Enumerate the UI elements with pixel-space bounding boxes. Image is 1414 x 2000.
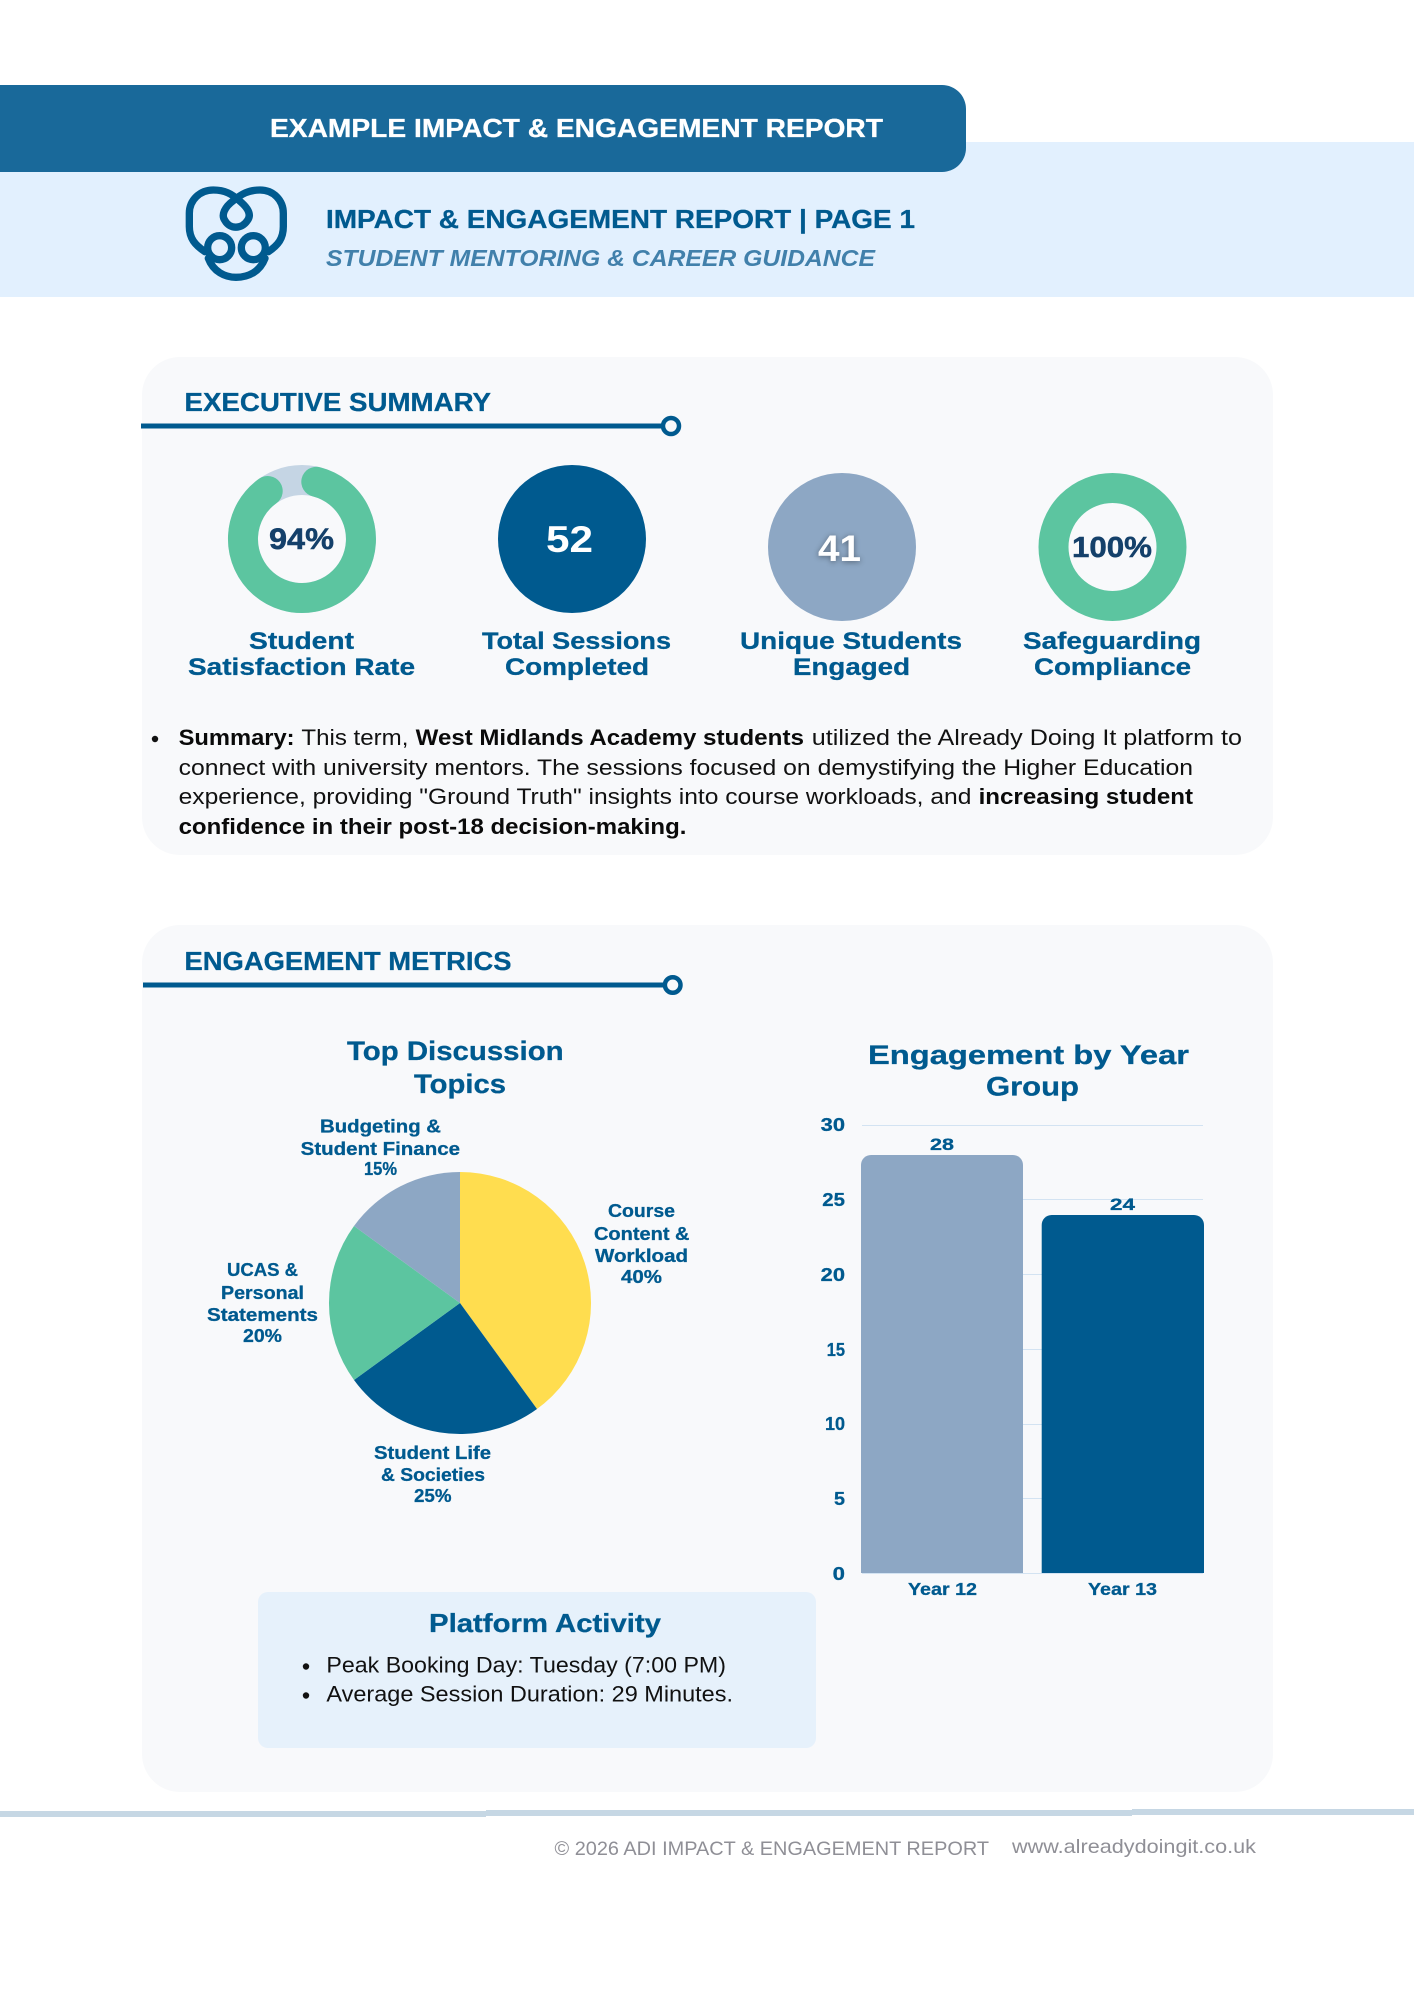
bar chart bbox=[821, 1115, 1204, 1599]
pie label: student life: Student Life bbox=[374, 1442, 491, 1463]
label: sessions bbox=[482, 628, 671, 681]
bar chart title: Engagement by Year bbox=[868, 1040, 1190, 1070]
header bar bbox=[0, 85, 966, 172]
kpi: unique students bbox=[768, 473, 916, 621]
bar value: 24: 24 bbox=[1110, 1195, 1136, 1214]
y axis labels: 30 bbox=[821, 1115, 845, 1135]
summary text: experience, providing "Ground Truth" insights into course workloads, and bbox=[179, 784, 971, 809]
x label: year 13: Year 13 bbox=[1088, 1579, 1157, 1599]
bar: year 13 bbox=[1042, 1215, 1204, 1573]
pie label: ucas: 20% bbox=[243, 1325, 282, 1346]
summary text: connect with university mentors. The sessions focused on demystifying the Higher Education bbox=[179, 755, 1193, 780]
pie chart title bbox=[347, 1036, 564, 1099]
callout heading: Platform Activity bbox=[429, 1608, 662, 1638]
summary text: West Midlands Academy bbox=[416, 725, 697, 750]
summary text: students bbox=[703, 725, 804, 750]
pie label: budgeting: Student Finance bbox=[301, 1138, 460, 1159]
kpi: safeguarding donut bbox=[1054, 488, 1172, 606]
report title: IMPACT & ENGAGEMENT REPORT | PAGE 1 bbox=[326, 204, 915, 234]
summary text: confidence in their post-18 decision-making. bbox=[179, 814, 686, 839]
kpi: satisfaction donut bbox=[243, 480, 361, 598]
summary text: This term, bbox=[301, 725, 408, 750]
pie label: course content: Content & bbox=[594, 1223, 690, 1244]
y axis labels: 0 bbox=[833, 1564, 845, 1584]
pie label: student life: 25% bbox=[414, 1485, 452, 1506]
label: students: Engaged bbox=[793, 654, 910, 681]
bar chart title: Group bbox=[986, 1072, 1079, 1102]
pie label: student life: & Societies bbox=[381, 1464, 485, 1485]
kpi value: 41 bbox=[818, 528, 861, 569]
kpi value: 100% bbox=[1072, 532, 1152, 564]
kpi: total sessions bbox=[498, 465, 646, 613]
pie chart title: Top Discussion bbox=[347, 1036, 564, 1066]
y axis labels: 10 bbox=[825, 1414, 845, 1434]
panel: engagement metrics bbox=[142, 925, 1273, 1792]
header bar title: EXAMPLE IMPACT & ENGAGEMENT REPORT bbox=[270, 113, 883, 143]
pie label: course content: 40% bbox=[621, 1266, 662, 1287]
label: sessions: Total Sessions bbox=[482, 628, 671, 655]
summary text: Summary: bbox=[179, 725, 295, 750]
x label: year 12: Year 12 bbox=[908, 1579, 977, 1599]
callout list: Average Session Duration: 29 Minutes. bbox=[326, 1682, 733, 1707]
label: satisfaction bbox=[188, 628, 415, 681]
heading: executive summary: EXECUTIVE SUMMARY bbox=[184, 387, 491, 417]
pie label: student life bbox=[374, 1442, 491, 1506]
heading rule bbox=[143, 977, 680, 993]
bar chart title bbox=[868, 1040, 1190, 1102]
pie label: budgeting: Budgeting & bbox=[320, 1116, 441, 1136]
y axis labels: 20 bbox=[821, 1265, 845, 1285]
icon: logo bbox=[189, 190, 283, 277]
label: students: Unique Students bbox=[740, 628, 962, 655]
summary text: utilized the Already Doing It platform to bbox=[812, 725, 1242, 750]
pie label: ucas: Statements bbox=[207, 1304, 318, 1325]
heading rule bbox=[141, 418, 679, 434]
kpi value: 94% bbox=[269, 523, 334, 556]
pie label: course content bbox=[594, 1200, 690, 1287]
pie label: ucas: Personal bbox=[221, 1282, 304, 1303]
footer rule bbox=[0, 1809, 1414, 1817]
pie label: course content: Workload bbox=[595, 1245, 688, 1266]
callout list: Peak Booking Day: Tuesday (7:00 PM) bbox=[326, 1653, 726, 1678]
label: safeguarding: Compliance bbox=[1034, 654, 1191, 681]
y axis labels: 15 bbox=[827, 1340, 845, 1360]
panel: executive summary bbox=[141, 357, 1273, 855]
label: satisfaction: Satisfaction Rate bbox=[188, 654, 415, 681]
pie chart bbox=[329, 1172, 591, 1434]
footer copyright: © 2026 ADI IMPACT & ENGAGEMENT REPORT bbox=[554, 1838, 989, 1860]
pie label: budgeting bbox=[301, 1116, 460, 1179]
y axis labels: 25 bbox=[822, 1190, 845, 1210]
heading: engagement metrics: ENGAGEMENT METRICS bbox=[184, 946, 512, 976]
label: safeguarding: Safeguarding bbox=[1023, 628, 1201, 655]
summary text: increasing student bbox=[979, 784, 1194, 809]
header band bbox=[0, 142, 1414, 297]
label: sessions: Completed bbox=[505, 654, 649, 681]
bar: year 12 bbox=[861, 1155, 1023, 1573]
y axis labels: 5 bbox=[834, 1489, 845, 1509]
pie label: ucas bbox=[207, 1259, 318, 1346]
y axis labels bbox=[821, 1115, 845, 1584]
label: safeguarding bbox=[1023, 628, 1201, 681]
pie chart title: Topics bbox=[414, 1069, 506, 1099]
report subtitle: STUDENT MENTORING & CAREER GUIDANCE bbox=[326, 245, 876, 271]
kpi value: 52 bbox=[546, 519, 593, 560]
callout list bbox=[303, 1653, 733, 1707]
pie label: ucas: UCAS & bbox=[227, 1259, 298, 1280]
footer url: www.alreadydoingit.co.uk bbox=[1011, 1836, 1256, 1858]
bar value: 28: 28 bbox=[930, 1135, 954, 1154]
label: satisfaction: Student bbox=[249, 628, 354, 655]
pie label: budgeting: 15% bbox=[364, 1158, 397, 1179]
label: students bbox=[740, 628, 962, 681]
pie label: course content: Course bbox=[608, 1200, 675, 1221]
callout: platform activity bbox=[258, 1592, 816, 1748]
summary text bbox=[152, 725, 1242, 839]
